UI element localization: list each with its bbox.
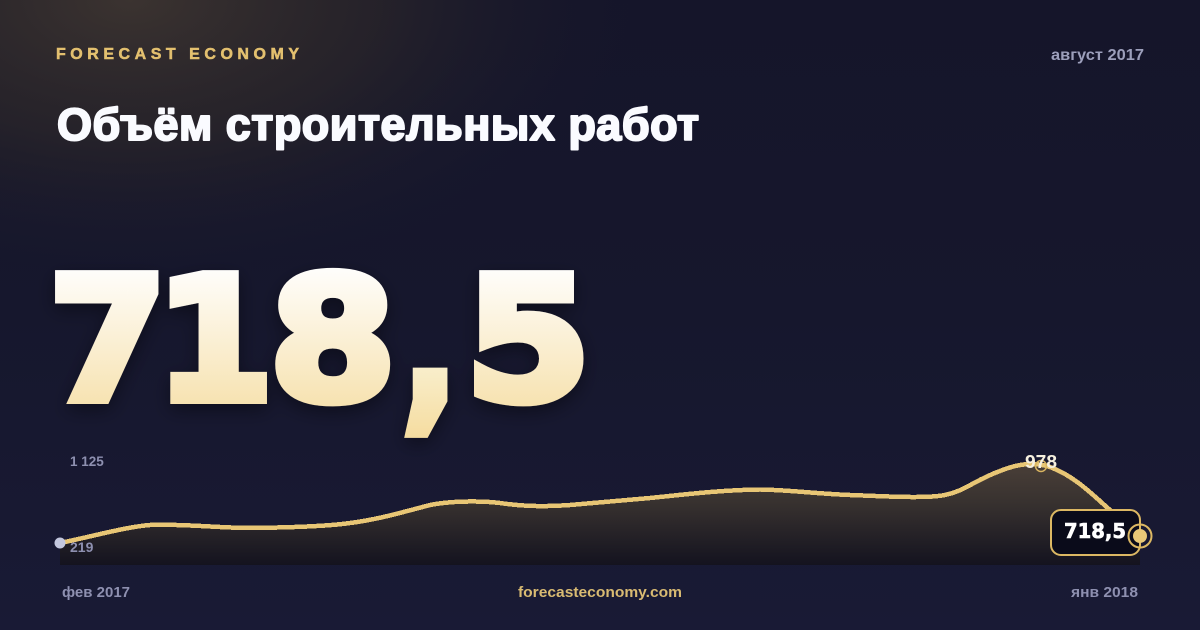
start point — [54, 538, 66, 548]
date: август 2017 — [1051, 47, 1144, 64]
end point marker — [1128, 524, 1152, 548]
big value: 8 — [270, 242, 396, 440]
big value: 5 — [465, 242, 591, 440]
big value: 1 — [155, 242, 274, 440]
peak marker — [1036, 460, 1046, 472]
axis label end: янв 2018 — [1071, 584, 1138, 601]
peak label: 978 — [1025, 452, 1057, 472]
current value callout: 718,5 — [1064, 519, 1126, 543]
brand name: FORECAST ECONOMY — [56, 46, 299, 63]
big value — [49, 240, 591, 450]
big value: 7 — [49, 242, 167, 440]
line chart — [54, 452, 1152, 565]
source link: forecasteconomy.com — [518, 584, 682, 601]
area under line — [60, 464, 1140, 565]
axis label start: фев 2017 — [62, 584, 130, 601]
big value: , — [402, 240, 458, 450]
scale max label: 1 125 — [70, 454, 104, 469]
scale min label: 219 — [70, 539, 94, 555]
line — [60, 464, 1140, 543]
title: Объём строительных работ — [57, 99, 699, 150]
current value callout — [1051, 510, 1140, 555]
